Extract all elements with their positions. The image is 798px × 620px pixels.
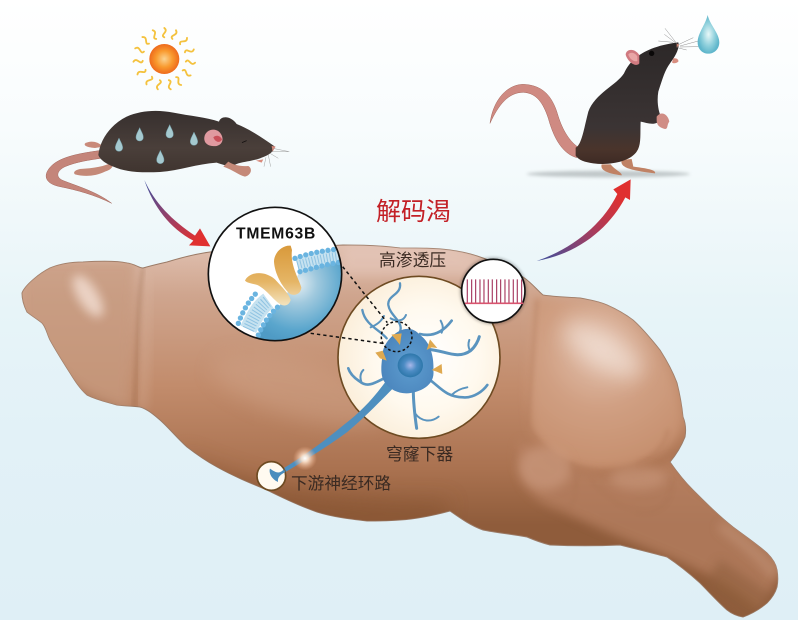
protein name: TMEM63B [236,226,315,243]
arrow: from mouse to TMEM63B [144,180,210,246]
label: hyperosmolarity: 高渗透压 [379,251,446,270]
brain [20,245,790,620]
cell body [381,329,434,393]
nucleus [398,353,423,377]
axon to downstream circuit [282,382,394,473]
arrow: from brain to mouse [537,179,631,261]
downstream terminal circle [257,446,317,490]
panel: neuron in SFO [282,276,500,473]
panel: spike train [460,258,527,324]
protein [245,273,291,305]
label: downstream neural circuit: 下游神经环路 [291,474,391,493]
label: subfornical organ: 穹窿下器 [386,445,453,464]
dendrites [348,283,487,428]
hot lying mouse with sweat drops [46,111,289,203]
light flash [293,446,317,470]
TMEM63B receptors [375,333,442,374]
ground shadow [527,171,690,177]
dashed zoom lines [311,267,412,352]
standing mouse drinking [490,15,719,177]
title: 解码渴 [376,198,451,226]
sun icon [133,28,195,90]
panel: TMEM63B membrane close-up [208,207,343,347]
icon: water drop [698,15,719,54]
